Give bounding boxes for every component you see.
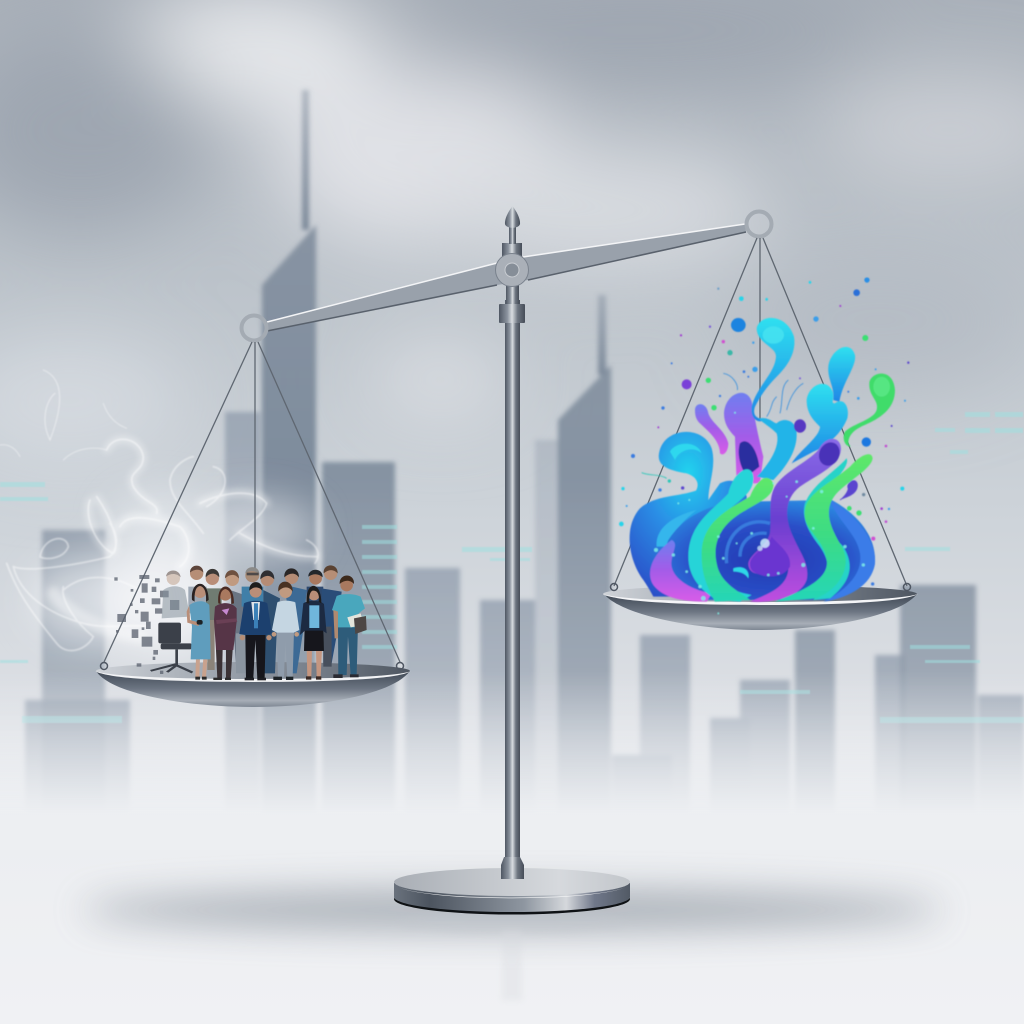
left ring xyxy=(242,316,266,340)
finial xyxy=(505,206,520,228)
right buildings xyxy=(900,585,976,820)
flame: purple inner lobe xyxy=(750,537,790,576)
ground fade xyxy=(0,670,1024,850)
pan inner xyxy=(603,585,917,603)
back person 5 xyxy=(242,567,263,607)
front person: man in white shirt xyxy=(272,582,299,680)
flame: green right swirl xyxy=(775,454,873,602)
pan bowl xyxy=(604,594,917,630)
flame: right blue wing xyxy=(823,500,875,602)
back person 3 xyxy=(206,569,222,670)
floating droplets xyxy=(619,277,909,586)
flame: central purple xyxy=(748,439,841,602)
back row people xyxy=(162,565,342,673)
clouds xyxy=(0,0,1024,460)
column foot collar xyxy=(501,857,524,879)
flame: green mid swirl xyxy=(702,478,773,602)
flame: purple dot behind xyxy=(794,419,806,433)
base reflection xyxy=(397,910,627,1000)
front person: woman in blue dress xyxy=(187,584,211,680)
left pan xyxy=(95,662,411,707)
ground shadow xyxy=(82,890,942,930)
disintegrating fragments xyxy=(114,575,179,674)
back person 4 xyxy=(225,570,249,673)
colourful liquid flames xyxy=(619,277,909,614)
far left building xyxy=(42,530,105,815)
back person 6 xyxy=(260,570,280,673)
front person: man in teal tee with folder xyxy=(332,575,367,678)
flame: concentric swirl rings xyxy=(726,522,770,563)
balance scale xyxy=(242,206,772,914)
right pan strings xyxy=(614,238,907,586)
front person: woman in black jacket xyxy=(300,586,327,680)
tall left tower xyxy=(262,225,316,820)
people group on left pan xyxy=(114,565,367,680)
centre right tower xyxy=(558,365,611,820)
flame: top drop highlight xyxy=(763,326,784,344)
flame: green curl highlight xyxy=(873,377,890,397)
beam xyxy=(267,224,746,331)
column collar xyxy=(499,304,525,323)
flame: small purple orb xyxy=(840,480,858,500)
pan rim xyxy=(95,671,411,682)
back person 7 xyxy=(284,568,307,673)
back person 2 xyxy=(188,566,207,613)
right ring xyxy=(746,212,772,236)
smoke haze xyxy=(30,490,315,655)
flame: cyan upper right drop xyxy=(828,347,855,402)
tall left tower spire xyxy=(302,90,309,230)
office chair xyxy=(150,623,193,673)
smoke wisps xyxy=(0,370,318,651)
centre right tower spire xyxy=(598,295,606,375)
blurred city skyline xyxy=(25,90,1024,820)
smoke thick ribbons xyxy=(53,439,317,637)
flame: purple inner dark xyxy=(739,441,759,477)
finial neck xyxy=(509,226,516,244)
splash tendrils xyxy=(642,373,852,500)
flame: cyan mid swirl xyxy=(688,469,753,602)
flame: blue highlight xyxy=(670,444,702,460)
flame: magenta lower left xyxy=(650,540,712,602)
left pan strings xyxy=(104,342,400,662)
pan bowl xyxy=(96,671,410,707)
flame: highlights and white core xyxy=(733,539,770,578)
base xyxy=(394,868,630,914)
pivot hub xyxy=(496,254,528,286)
droplets inside flames xyxy=(654,412,865,614)
holographic data lines xyxy=(0,412,1024,723)
flame: big blue left xyxy=(630,432,747,597)
flame: purple upper xyxy=(724,393,763,483)
column xyxy=(505,300,520,860)
left mid building xyxy=(322,462,395,812)
front person: woman in purple xyxy=(213,586,237,680)
right pan xyxy=(603,584,918,630)
flame: magenta tendril xyxy=(695,404,728,454)
upper neck xyxy=(506,280,519,304)
smoke xyxy=(0,370,318,655)
pan inner xyxy=(96,662,410,680)
back person 9 xyxy=(322,565,342,667)
flame: cyan right swirl xyxy=(804,458,850,600)
flame: central cyan column xyxy=(757,418,797,480)
flame: purple tip dark xyxy=(815,439,843,469)
pan rim xyxy=(603,594,918,605)
flame: top cyan drop xyxy=(751,318,794,421)
flame: green curl xyxy=(844,374,895,447)
back person 8 xyxy=(307,570,323,617)
upper collar xyxy=(502,243,522,261)
flame: body deep blue mass xyxy=(664,500,875,600)
front person: man in navy suit xyxy=(239,582,272,680)
back person 1 faded xyxy=(162,570,190,618)
flame: cyan right pair xyxy=(792,384,848,463)
far buildings xyxy=(25,412,1024,820)
flame: blue secondary arm xyxy=(657,510,697,547)
